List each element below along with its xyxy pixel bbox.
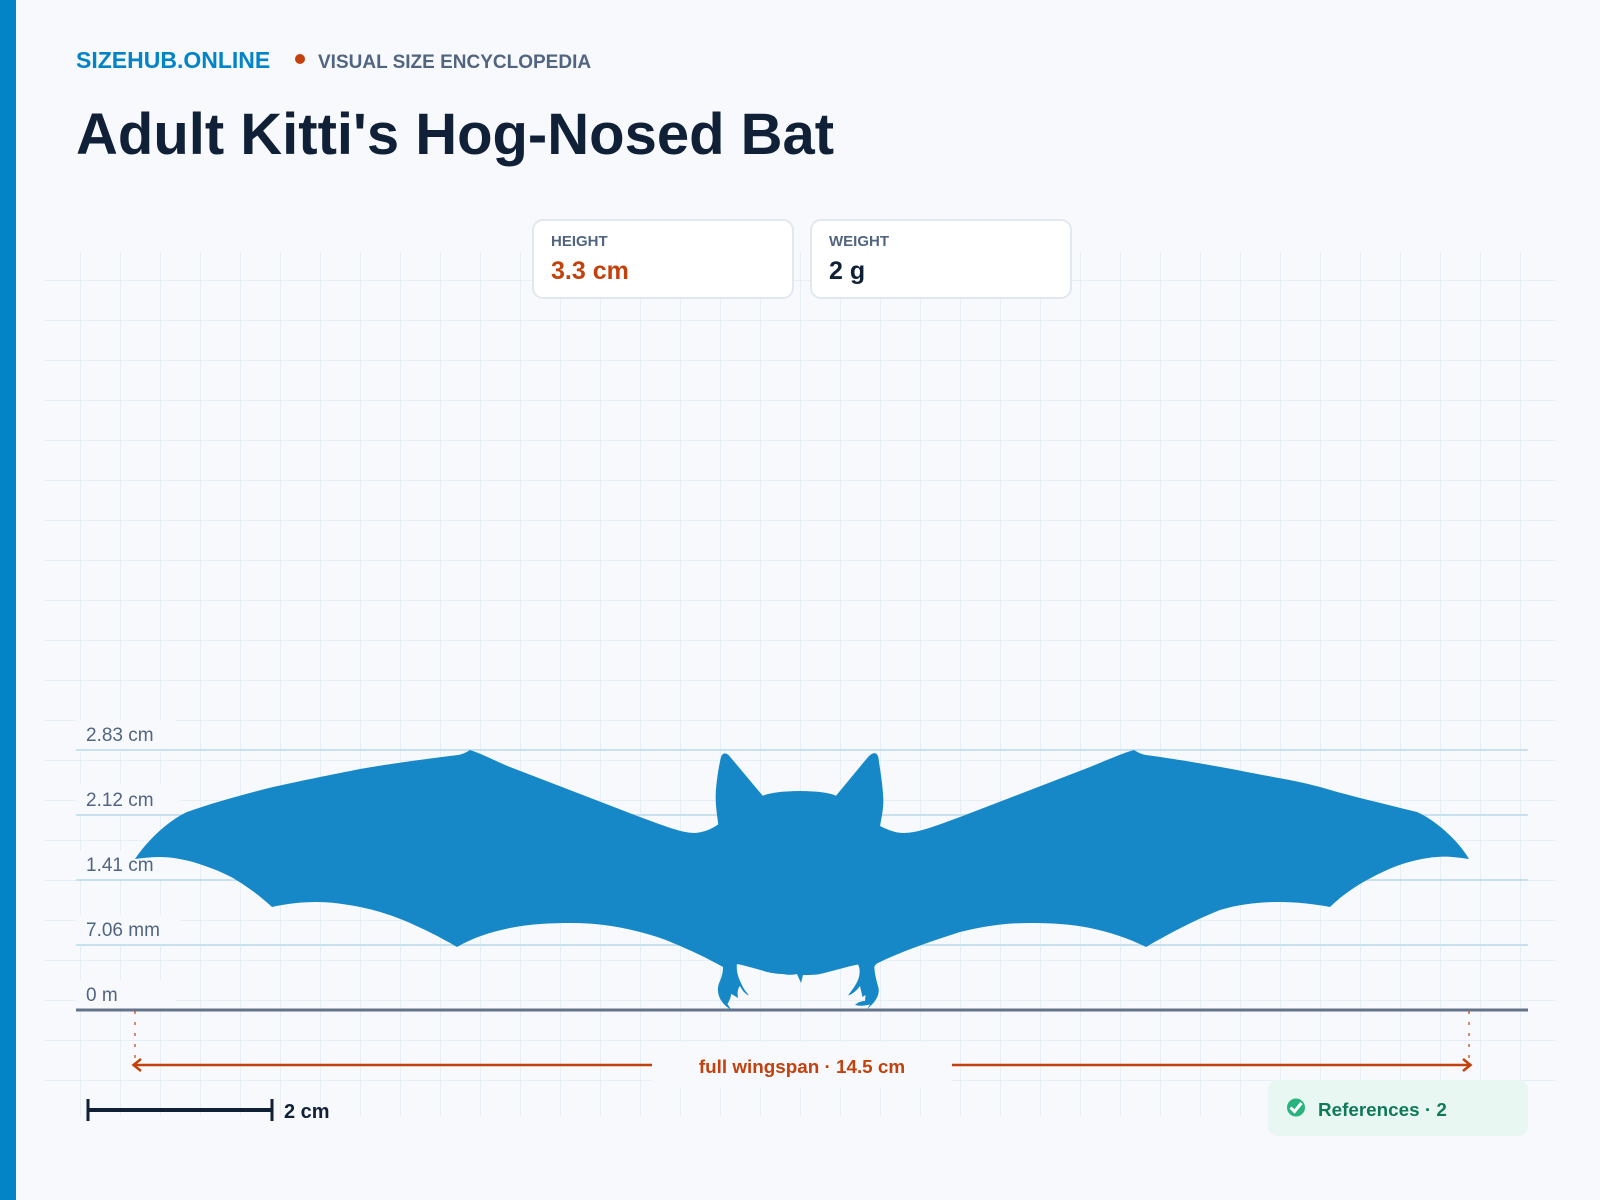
references badge — [1268, 1080, 1528, 1136]
title: Adult Kitti's Hog-Nosed Bat — [76, 102, 834, 167]
header: brand line: VISUAL SIZE ENCYCLOPEDIA — [318, 52, 591, 73]
height reference lines and labels: 2.12 cm — [86, 790, 154, 811]
wingspan dimension: full wingspan · 14.5 cm — [699, 1056, 905, 1077]
stat card: weight — [811, 220, 1071, 298]
stat card: height — [533, 220, 793, 298]
wingspan dimension — [134, 1011, 1470, 1087]
height reference lines and labels: 0 m — [86, 985, 118, 1006]
stat card: height: 3.3 cm — [551, 257, 629, 285]
stat card: height: HEIGHT — [551, 233, 608, 250]
height reference lines and labels: 2.83 cm — [86, 725, 154, 746]
height reference lines and labels: 7.06 mm — [86, 920, 160, 941]
bat silhouette — [135, 750, 1469, 1010]
header: brand line — [76, 47, 591, 73]
header: brand line: SIZEHUB.ONLINE — [76, 47, 270, 73]
left accent bar — [0, 0, 16, 1200]
height reference lines and labels — [76, 720, 1528, 1010]
scale bar — [88, 1099, 330, 1123]
stat card: weight: 2 g — [829, 257, 865, 285]
scale bar: 2 cm — [284, 1101, 330, 1123]
stat card: weight: WEIGHT — [829, 233, 889, 250]
references badge: References · 2 — [1318, 1099, 1447, 1120]
height reference lines and labels: 1.41 cm — [86, 855, 154, 876]
